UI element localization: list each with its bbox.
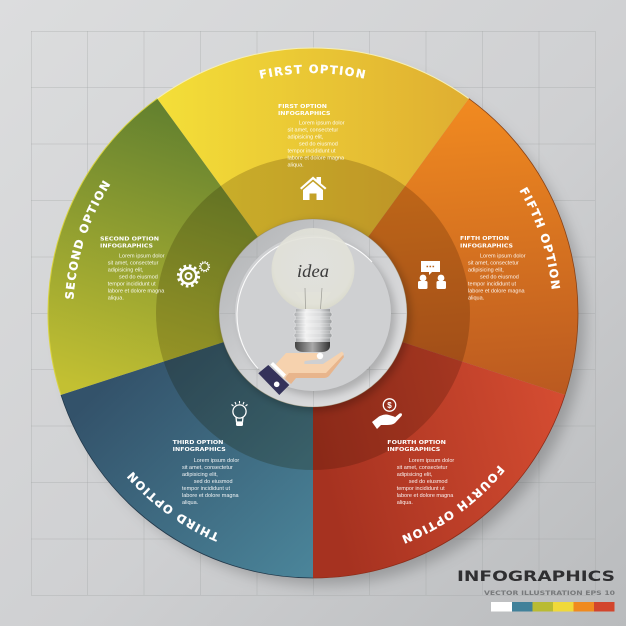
heading: second option: SECOND OPTION (65, 180, 110, 299)
text block: third option: adipisicing elit, (182, 472, 218, 478)
text block: second option: Lorem ipsum dolor (119, 254, 165, 260)
bulb screw base (294, 309, 332, 352)
text block: third option: sed do eiusmod (194, 479, 233, 485)
text block: fifth option (460, 236, 526, 301)
text block: second option: SECOND OPTION (100, 236, 159, 242)
text block: third option: THIRD OPTION (173, 440, 223, 446)
text block: first option: Lorem ipsum dolor (299, 121, 345, 127)
text block: fourth option: tempor incididunt ut (397, 486, 445, 492)
heading: third option: THIRD OPTION (126, 472, 218, 542)
text block: first option: adipisicing elit, (288, 135, 324, 141)
text block: third option: sit amet, consectetur (182, 465, 233, 471)
text block: first option: aliqua. (288, 163, 304, 169)
center disc (219, 219, 411, 411)
icon: idea bulb (272, 228, 354, 352)
text block: first option: sit amet, consectetur (288, 128, 338, 134)
panel: fourth option segment (313, 313, 565, 578)
text block: fourth option: Lorem ipsum dolor (409, 458, 454, 464)
text block: fourth option: sed do eiusmod (409, 479, 448, 485)
text block: second option: labore et dolore magna (108, 289, 165, 295)
heading: fourth option: FOURTH OPTION (402, 465, 505, 544)
text block: fourth option: INFOGRAPHICS (387, 447, 441, 453)
text block: third option: tempor incididunt ut (182, 486, 230, 492)
text block: fourth option: aliqua. (397, 500, 413, 506)
text block: third option (173, 440, 240, 506)
text block: fourth option (387, 440, 454, 506)
circular diagram (48, 48, 578, 578)
icon: money hand (372, 399, 402, 429)
heading: fifth option: FIFTH OPTION (520, 186, 560, 289)
title: infographics: INFOGRAPHICS (457, 569, 615, 585)
subtitle: VECTOR ILLUSTRATION EPS 10 (484, 590, 615, 597)
text block: fourth option: adipisicing elit, (397, 472, 433, 478)
text block: fifth option: adipisicing elit, (468, 267, 504, 273)
text block: first option: INFOGRAPHICS (278, 111, 331, 117)
icon: light bulb (232, 401, 248, 426)
text block: first option: tempor incididunt ut (288, 149, 336, 155)
panel: second option segment (48, 99, 313, 395)
bulb label: idea: idea (297, 261, 329, 281)
text block: second option: tempor incididunt ut (108, 282, 156, 288)
text block: first option: labore et dolore magna (288, 156, 345, 162)
text block: second option: aliqua. (108, 296, 124, 302)
colour legend bar (491, 602, 614, 612)
text block: third option: INFOGRAPHICS (173, 447, 226, 453)
text block: fifth option: FIFTH OPTION (460, 236, 509, 242)
text block: fourth option: FOURTH OPTION (387, 440, 446, 446)
icon: money hand: $ (387, 401, 392, 410)
text block: second option: adipisicing elit, (108, 268, 144, 274)
text block: second option: INFOGRAPHICS (100, 244, 153, 250)
text block: third option: labore et dolore magna (182, 493, 240, 499)
text block: fifth option: sit amet, consectetur (468, 260, 519, 266)
icon: gears (178, 262, 210, 286)
text block: third option: Lorem ipsum dolor (194, 458, 239, 464)
heading: first option: FIRST OPTION (259, 64, 366, 79)
text block: first option (278, 104, 345, 169)
text block: fifth option: INFOGRAPHICS (460, 243, 513, 249)
icon: people talking (418, 261, 446, 289)
text block: fifth option: labore et dolore magna (468, 288, 526, 294)
text block: fifth option: Lorem ipsum dolor (480, 253, 526, 259)
icon: hand holding bulb (258, 352, 344, 395)
icon: house (300, 176, 326, 200)
text block: fifth option: aliqua. (468, 295, 485, 301)
text block: fourth option: labore et dolore magna (397, 493, 454, 499)
panel: first option segment (157, 48, 469, 313)
text block: fifth option: sed do eiusmod (480, 274, 519, 280)
text block: first option: sed do eiusmod (299, 142, 338, 148)
text block: third option: aliqua. (182, 500, 199, 506)
panel: third option segment (61, 313, 313, 578)
text block: second option: sit amet, consectetur (108, 261, 159, 267)
text block: second option (100, 236, 165, 302)
text block: fourth option: sit amet, consectetur (397, 465, 448, 471)
panel: fifth option segment (313, 99, 578, 395)
text block: second option: sed do eiusmod (119, 275, 158, 281)
text block: fifth option: tempor incididunt ut (468, 281, 516, 287)
inner dark ring (156, 156, 470, 470)
text block: first option: FIRST OPTION (278, 104, 327, 110)
